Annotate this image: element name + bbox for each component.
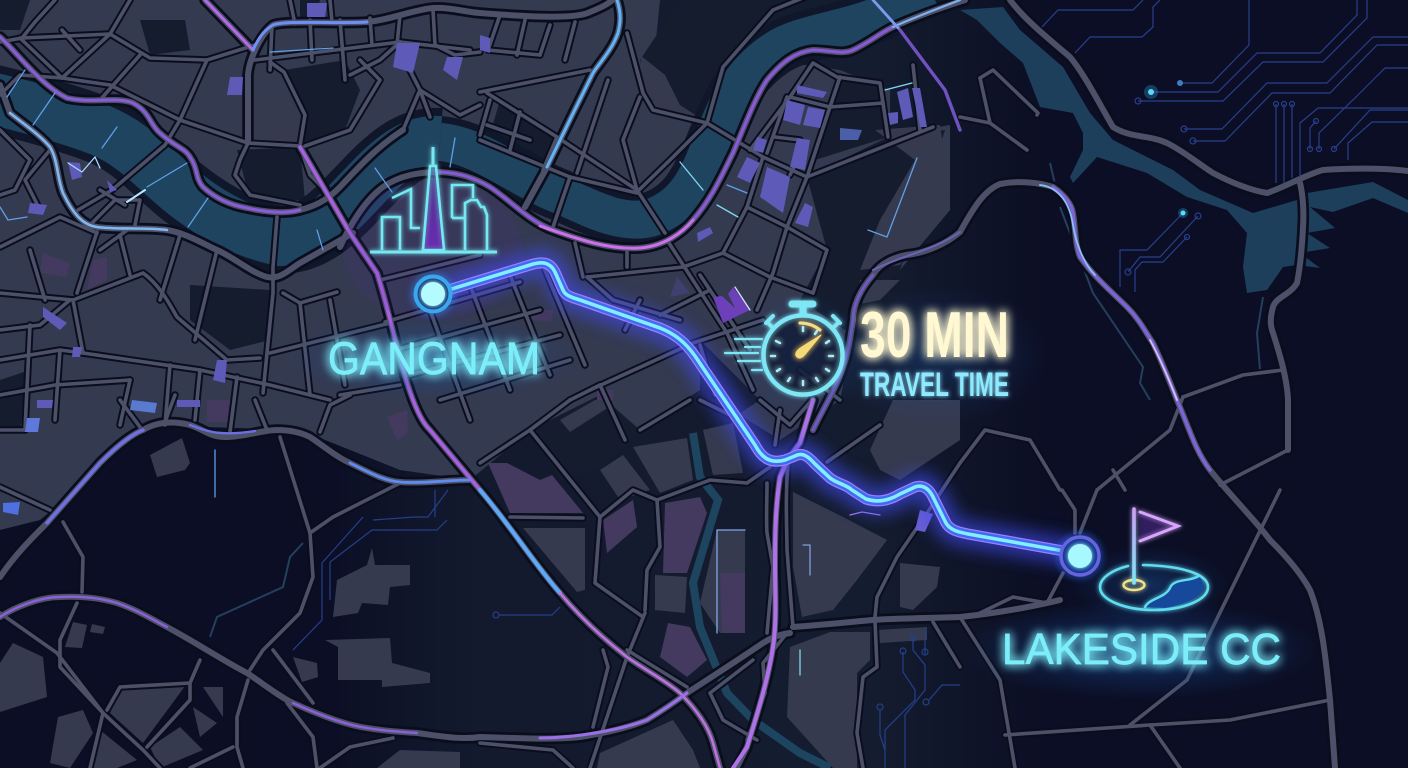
south circuit traces (293, 490, 960, 768)
travel route (432, 263, 1075, 553)
callout: 30 min travel time (860, 298, 1009, 404)
marker: Gangnam (411, 272, 455, 316)
thin teal creeks (210, 163, 1263, 637)
city block mass (0, 0, 950, 530)
thin neon map accents (0, 48, 917, 675)
marker: Lakeside CC (1056, 532, 1104, 580)
narrow stream (693, 433, 830, 768)
icon: golf flag and green (1100, 509, 1208, 610)
circuit glow nodes (1144, 80, 1188, 218)
label: Lakeside CC: LAKESIDE CC (1002, 625, 1281, 674)
muted purple lots (40, 253, 745, 677)
label: Gangnam: GANGNAM (328, 333, 540, 384)
river shore (0, 0, 930, 240)
river (0, 0, 930, 240)
dark parks (0, 0, 945, 480)
highlighted purple city lots (3, 3, 933, 532)
icon: city skyline (370, 147, 497, 252)
circuit traces top right (1042, 0, 1408, 292)
headline: 30 min: 30 MIN (860, 298, 1009, 371)
urban ground (0, 0, 1050, 768)
east river and lake (960, 7, 1408, 293)
icon: stopwatch (725, 304, 842, 394)
gray blocks in parks (0, 55, 960, 768)
subhead: travel time: TRAVEL TIME (860, 366, 1009, 404)
text halo glows (284, 180, 1322, 700)
